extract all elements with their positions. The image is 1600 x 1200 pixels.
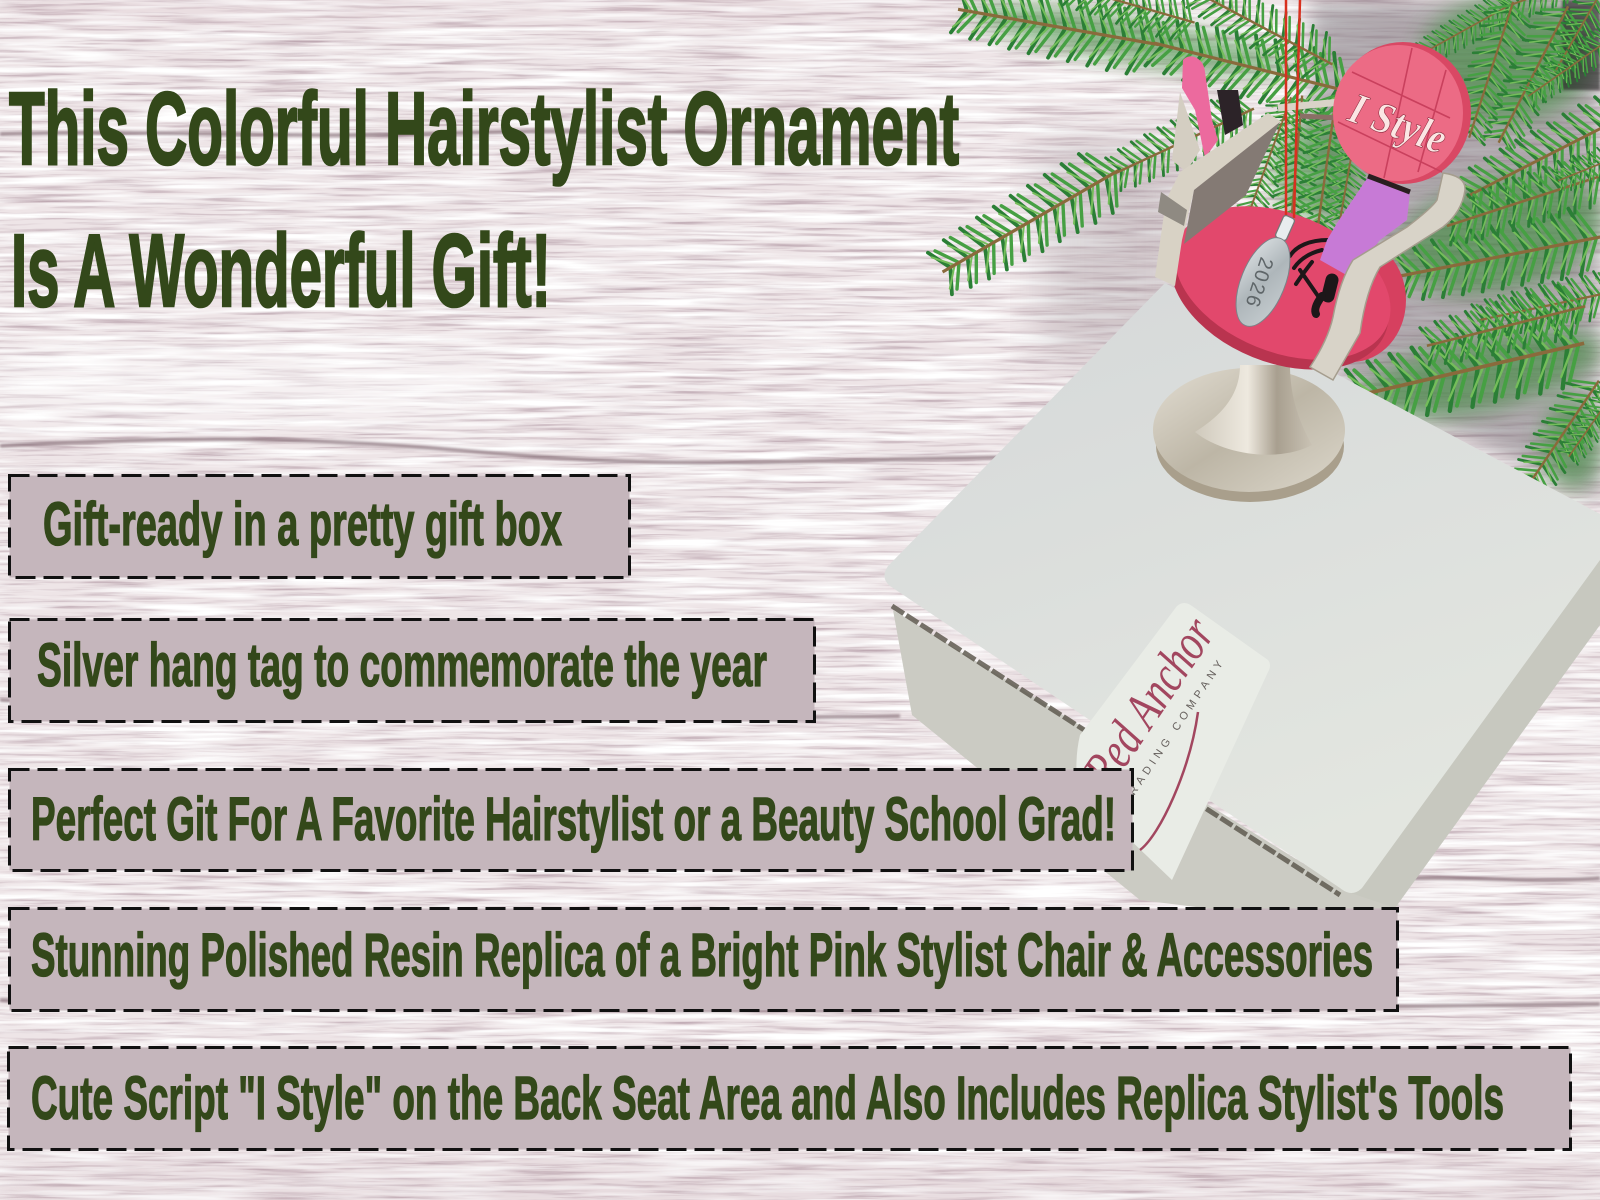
pine branches <box>923 0 1600 524</box>
left armrest <box>1155 113 1282 286</box>
right branches <box>1343 0 1600 524</box>
green underpaint of the foliage <box>969 0 1600 489</box>
silver year tag: 2026 <box>1240 254 1277 311</box>
feature 4 <box>10 908 1398 1010</box>
chair back rail <box>1278 102 1340 118</box>
dark top-right corner <box>1562 0 1600 90</box>
label sticker <box>1072 603 1270 880</box>
top branch <box>949 0 1360 125</box>
grey backdrop behind needles <box>1310 0 1600 500</box>
title line 2: Is A Wonderful Gift! <box>11 213 551 328</box>
feature 3 <box>10 770 1132 870</box>
box right side <box>1351 545 1600 908</box>
title <box>9 71 959 328</box>
box top face <box>884 283 1600 893</box>
chair back round with I Style <box>1333 42 1471 184</box>
feature 1 <box>10 476 630 578</box>
sticker swoosh <box>1140 712 1198 850</box>
feature 2 <box>10 620 814 722</box>
sticker sub text: TRADING COMPANY <box>1121 655 1228 807</box>
left branch <box>923 85 1265 303</box>
feature 1: Gift-ready in a pretty gift box <box>43 490 562 558</box>
feature 2: Silver hang tag to commemorate the year <box>37 631 767 699</box>
corrugated edge <box>892 606 1340 895</box>
rear seat side <box>1298 238 1406 362</box>
gift box <box>884 283 1600 925</box>
feature 5 <box>8 1048 1570 1150</box>
box left side <box>893 610 1400 925</box>
red hanging cord <box>1286 0 1300 218</box>
I Style lettering: I Style <box>1342 83 1453 164</box>
ornament: stylist chair <box>1147 0 1471 502</box>
silver year tag <box>1225 215 1301 334</box>
tools: pink comb and black brush <box>1172 56 1243 172</box>
mid branch behind chair <box>1229 88 1381 249</box>
black comb and cord tools <box>1290 240 1332 314</box>
right armrest <box>1310 173 1465 380</box>
chair pedestal base <box>1153 365 1345 502</box>
seat cushion <box>1147 176 1414 400</box>
hair dryer <box>1320 176 1410 277</box>
sticker logotype: Red Anchor <box>1072 607 1227 797</box>
